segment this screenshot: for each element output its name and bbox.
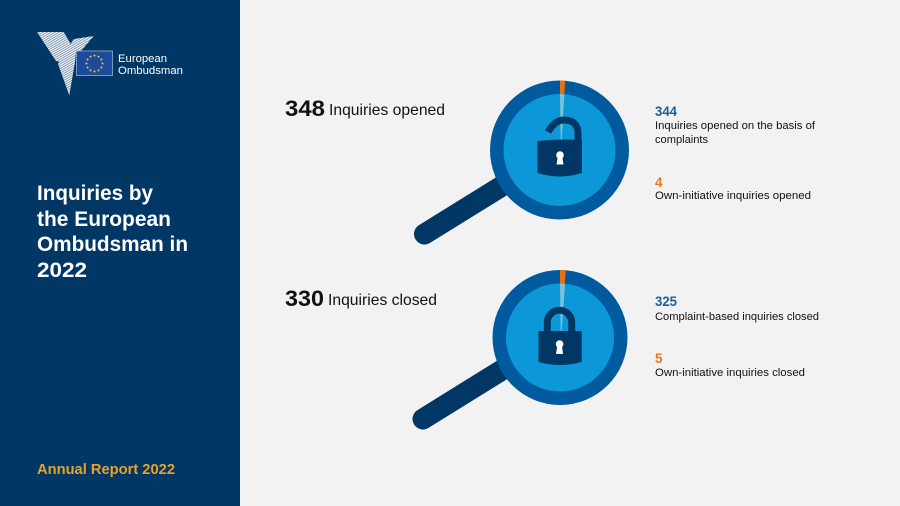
magnifier: inquiries closed donut <box>423 270 628 419</box>
heading: 330 inquiries closed <box>285 286 437 311</box>
stats: opened breakdown <box>655 104 816 202</box>
stats: closed breakdown: 325 <box>655 294 677 309</box>
stats: closed breakdown <box>655 294 819 379</box>
stats: closed breakdown: Complaint-based inquiries closed <box>655 311 819 323</box>
donut ring <box>492 270 628 405</box>
heading: 348 inquiries opened: 348 <box>285 96 325 121</box>
light beam <box>560 284 565 331</box>
stats: closed breakdown: Own-initiative inquiries closed <box>655 367 805 379</box>
magnifier handle <box>423 365 510 419</box>
title: Inquiries by <box>37 182 153 205</box>
footer: Annual Report 2022: Annual Report 2022 <box>37 462 175 478</box>
logo text: Ombudsman <box>118 65 183 77</box>
stats: opened breakdown: 4 <box>655 175 663 190</box>
title: Ombudsman in <box>37 233 188 256</box>
title: 2022 <box>37 259 87 282</box>
stats: opened breakdown: complaints <box>655 134 709 146</box>
title: the European <box>37 208 171 231</box>
title <box>37 182 188 282</box>
orange ring segment <box>560 270 566 284</box>
icon: open padlock <box>538 120 582 176</box>
logo wings <box>37 32 94 96</box>
donut ring <box>490 80 629 220</box>
logo: European Ombudsman <box>37 32 183 96</box>
heading: 330 inquiries closed: 330 <box>285 286 324 311</box>
panel: sidebar <box>0 0 240 506</box>
logo text: European <box>118 53 167 65</box>
magnifier handle <box>424 181 510 234</box>
stats: opened breakdown: Inquiries opened on the basis of <box>655 120 816 132</box>
heading: 348 inquiries opened: Inquiries opened <box>329 102 445 119</box>
icon: closed padlock <box>538 310 582 365</box>
icon: EU flag <box>76 51 112 76</box>
magnifier lens <box>506 284 614 392</box>
stats: closed breakdown: 5 <box>655 351 663 366</box>
logo text <box>118 53 183 77</box>
orange ring segment <box>560 80 565 94</box>
stats: opened breakdown: Own-initiative inquiries opened <box>655 190 811 202</box>
heading: 348 inquiries opened <box>285 96 445 121</box>
magnifier: inquiries opened donut <box>424 80 629 234</box>
light beam <box>560 94 564 140</box>
stats: opened breakdown: 344 <box>655 104 677 119</box>
magnifier lens <box>504 94 616 206</box>
heading: 330 inquiries closed: Inquiries closed <box>328 292 437 309</box>
